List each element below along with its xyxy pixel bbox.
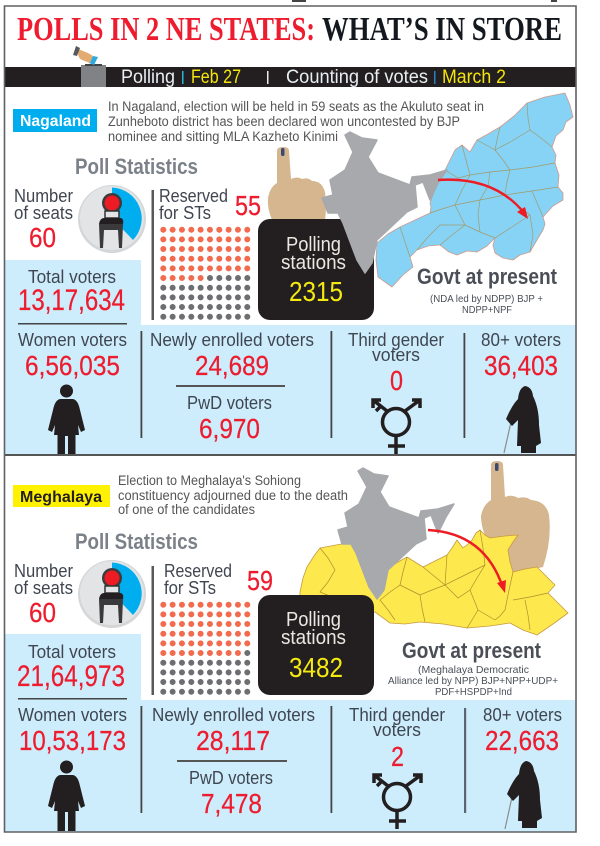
Nagaland number of seats: 60 bbox=[29, 222, 56, 253]
Nagaland newly enrolled and PwD voters: Newly enrolled voters bbox=[150, 330, 314, 350]
icon: ballot box bbox=[73, 46, 106, 87]
Nagaland newly enrolled and PwD voters: 6,970 bbox=[199, 413, 260, 444]
Nagaland government at present bbox=[417, 264, 558, 316]
Nagaland 80+ voters: 80+ voters bbox=[481, 330, 561, 350]
icon: woman bbox=[48, 384, 85, 455]
Nagaland reserved for STs bbox=[152, 186, 261, 320]
Nagaland government at present: Govt at present bbox=[417, 264, 558, 289]
Meghalaya polling stations box: 3482 bbox=[289, 652, 343, 683]
Meghalaya number of seats bbox=[14, 561, 73, 628]
Meghalaya newly enrolled and PwD voters bbox=[140, 705, 315, 819]
Nagaland note: Zunheboto district has been declared won uncontested by BJP bbox=[108, 114, 460, 129]
map: Meghalaya bbox=[300, 530, 568, 635]
Nagaland number of seats: of seats bbox=[14, 203, 73, 223]
icon: Meghalaya seats chair pie bbox=[78, 560, 146, 628]
Nagaland newly enrolled and PwD voters: 24,689 bbox=[195, 350, 269, 381]
Nagaland women voters: 6,56,035 bbox=[25, 350, 120, 381]
Meghalaya government at present: Govt at present bbox=[402, 638, 542, 663]
Meghalaya total voters: 21,64,973 bbox=[17, 660, 125, 693]
Meghalaya polling stations box: stations bbox=[281, 627, 346, 649]
Nagaland third gender voters bbox=[330, 330, 444, 454]
Nagaland government at present: NDPP+NPF bbox=[462, 304, 512, 316]
Meghalaya note: constituency adjourned due to the death bbox=[118, 488, 348, 503]
Nagaland 80+ voters: 36,403 bbox=[484, 350, 558, 381]
Meghalaya 80+ voters bbox=[464, 705, 562, 829]
map: Nagaland bbox=[376, 93, 573, 287]
icon: Meghalaya voting hand bbox=[481, 461, 550, 574]
Meghalaya label bbox=[13, 485, 110, 507]
arrow: Nagaland locator bbox=[438, 180, 528, 219]
Nagaland third gender voters: 0 bbox=[390, 365, 403, 396]
Nagaland label: Nagaland bbox=[20, 113, 91, 130]
Meghalaya government at present: PDF+HSPDP+Ind bbox=[435, 686, 512, 698]
Nagaland 80+ voters bbox=[464, 330, 561, 453]
Nagaland government at present: (NDA led by NDPP) BJP + bbox=[430, 293, 543, 305]
Meghalaya poll statistics heading: Poll Statistics bbox=[75, 529, 198, 554]
Nagaland women voters bbox=[18, 330, 127, 455]
Nagaland total voters: Total voters bbox=[28, 267, 116, 287]
icon: elderly woman bbox=[504, 386, 541, 453]
Nagaland poll statistics heading: Poll Statistics bbox=[75, 154, 198, 179]
Meghalaya newly enrolled and PwD voters: 28,117 bbox=[196, 725, 270, 756]
Meghalaya polling stations box: Polling bbox=[286, 609, 341, 631]
Meghalaya newly enrolled and PwD voters: 7,478 bbox=[201, 788, 262, 819]
Nagaland label bbox=[13, 109, 97, 132]
Nagaland polling stations box: 2315 bbox=[289, 276, 343, 307]
Meghalaya reserved for STs bbox=[152, 561, 273, 695]
date bar: Feb 27 bbox=[191, 67, 241, 88]
Nagaland note: nominee and sitting MLA Kazheto Kinimi bbox=[108, 129, 338, 144]
Meghalaya third gender voters bbox=[330, 705, 445, 829]
Meghalaya third gender voters: Third gender bbox=[349, 705, 445, 725]
title: POLLS IN 2 NE STATES: bbox=[17, 11, 315, 48]
Nagaland number of seats: Number bbox=[14, 186, 73, 206]
Meghalaya label: Meghalaya bbox=[20, 489, 102, 506]
Meghalaya number of seats: 60 bbox=[29, 597, 56, 628]
section backgrounds bbox=[5, 260, 576, 832]
Nagaland polling stations box: Polling bbox=[286, 234, 341, 256]
icon: Nagaland seats chair pie bbox=[78, 185, 146, 253]
Meghalaya women voters bbox=[18, 705, 127, 831]
date bar bbox=[5, 67, 576, 88]
Meghalaya number of seats: of seats bbox=[14, 578, 73, 598]
Meghalaya third gender voters: 2 bbox=[391, 741, 404, 772]
Meghalaya newly enrolled and PwD voters: PwD voters bbox=[189, 768, 273, 788]
Nagaland newly enrolled and PwD voters bbox=[140, 330, 314, 444]
Meghalaya newly enrolled and PwD voters: Newly enrolled voters bbox=[152, 705, 315, 725]
arrow: Meghalaya locator bbox=[428, 530, 506, 593]
Meghalaya polling stations box bbox=[258, 595, 374, 695]
date bar: March 2 bbox=[442, 67, 506, 88]
Meghalaya total voters bbox=[17, 642, 127, 700]
Meghalaya dot matrix bbox=[163, 605, 250, 692]
Nagaland number of seats bbox=[14, 186, 73, 253]
date bar: Counting of votes bbox=[286, 67, 428, 88]
section divider bbox=[5, 454, 576, 456]
Meghalaya total voters: Total voters bbox=[28, 642, 116, 662]
map: India, Nagaland panel bbox=[322, 132, 447, 273]
Nagaland polling stations box: stations bbox=[281, 252, 346, 274]
Nagaland women voters: Women voters bbox=[18, 330, 127, 350]
Nagaland third gender voters: voters bbox=[372, 345, 420, 365]
Meghalaya reserved for STs: Reserved bbox=[164, 561, 232, 581]
icon: woman bbox=[48, 760, 85, 831]
date bar: Polling bbox=[121, 67, 175, 88]
Nagaland dot matrix bbox=[163, 230, 250, 317]
Nagaland third gender voters: Third gender bbox=[348, 330, 444, 350]
Nagaland reserved for STs: Reserved bbox=[159, 186, 228, 206]
Meghalaya women voters: Women voters bbox=[18, 705, 127, 725]
Meghalaya reserved for STs: for STs bbox=[164, 578, 216, 598]
Nagaland reserved for STs: 55 bbox=[235, 190, 261, 221]
Meghalaya note: of one of the candidates bbox=[118, 502, 255, 517]
Nagaland reserved for STs: for STs bbox=[159, 203, 211, 223]
Nagaland newly enrolled and PwD voters: PwD voters bbox=[187, 393, 272, 413]
icon: elderly woman bbox=[505, 761, 542, 829]
Nagaland note bbox=[108, 99, 484, 144]
Nagaland note: In Nagaland, election will be held in 59 seats as the Akuluto seat in bbox=[108, 99, 484, 114]
icon: Nagaland voting hand bbox=[268, 147, 326, 220]
Meghalaya number of seats: Number bbox=[14, 561, 73, 581]
Nagaland total voters bbox=[18, 267, 127, 324]
Meghalaya 80+ voters: 22,663 bbox=[485, 725, 559, 756]
Meghalaya government at present bbox=[388, 638, 558, 698]
Nagaland total voters: 13,17,634 bbox=[18, 284, 125, 317]
Meghalaya note bbox=[118, 473, 348, 517]
Meghalaya government at present: (Meghalaya Democratic bbox=[418, 664, 529, 676]
Meghalaya government at present: Alliance led by NPP) BJP+NPP+UDP+ bbox=[388, 675, 558, 687]
icon: transgender symbol bbox=[373, 400, 420, 454]
Meghalaya women voters: 10,53,173 bbox=[19, 725, 126, 756]
Meghalaya 80+ voters: 80+ voters bbox=[483, 705, 562, 725]
cropped headline remnants bbox=[292, 0, 557, 2]
map: India, Meghalaya panel bbox=[338, 468, 454, 599]
Meghalaya reserved for STs: 59 bbox=[247, 565, 273, 596]
Meghalaya note: Election to Meghalaya's Sohiong bbox=[118, 473, 301, 488]
icon: transgender symbol bbox=[374, 775, 421, 829]
Nagaland polling stations box bbox=[258, 219, 374, 320]
Meghalaya third gender voters: voters bbox=[373, 720, 421, 740]
